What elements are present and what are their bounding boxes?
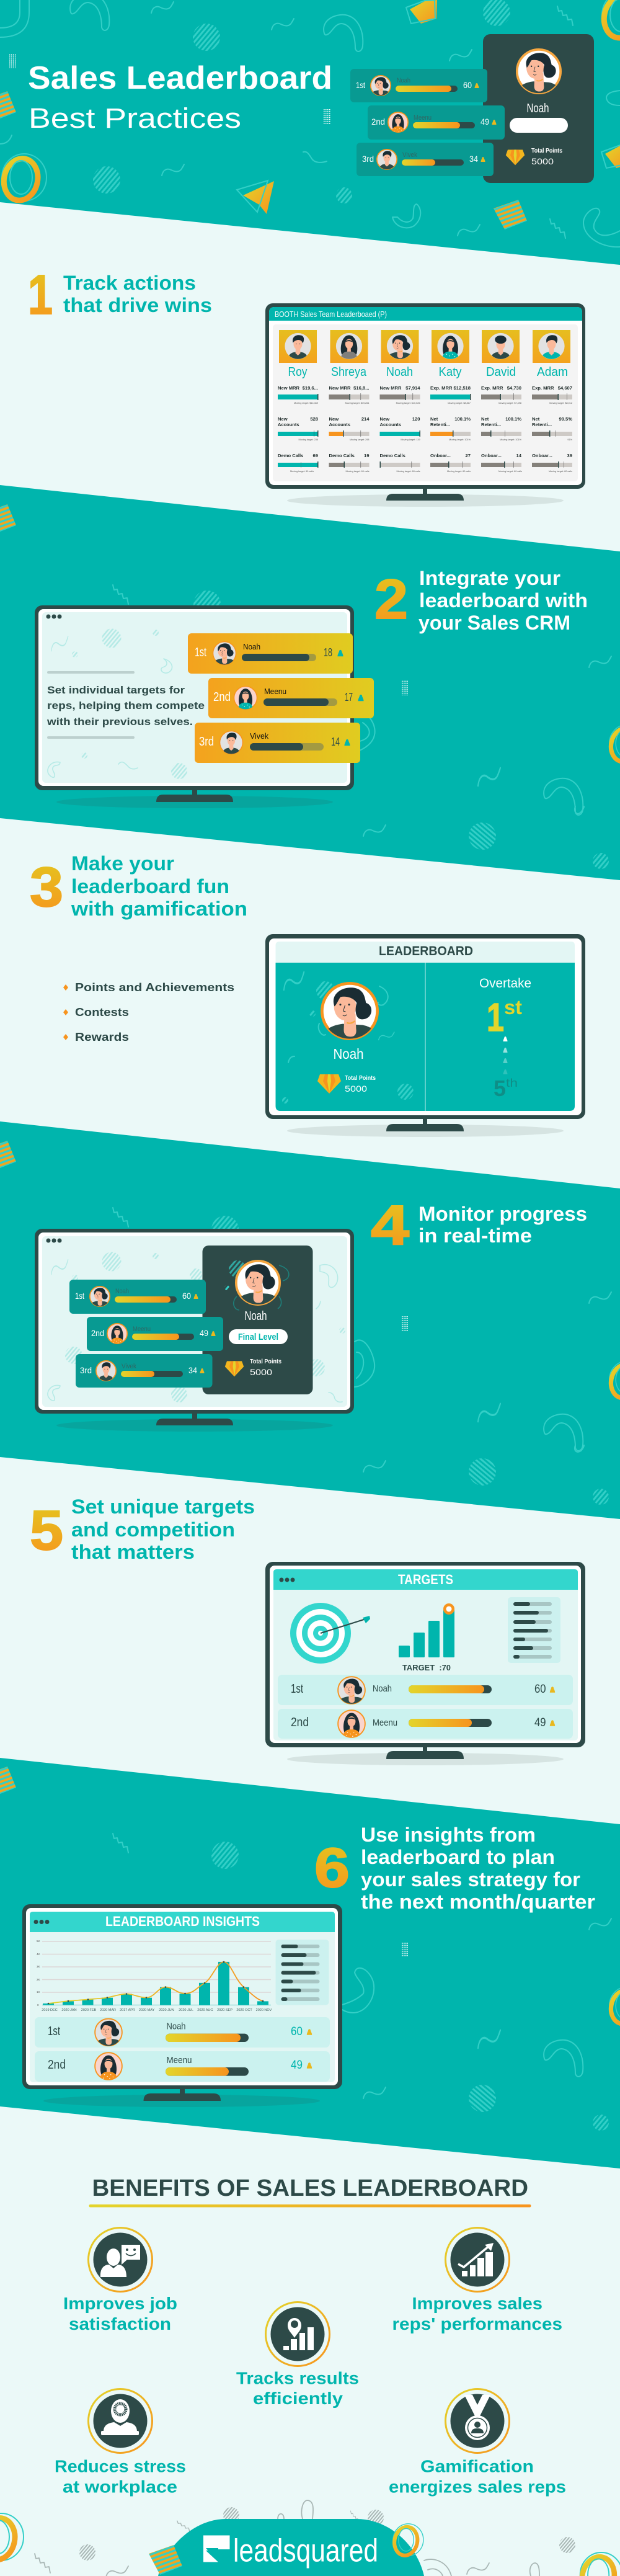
benefit: gamification: Gamification xyxy=(420,2456,534,2476)
overtake panel: 1 xyxy=(487,995,504,1040)
benefit: sales performance: reps' performances xyxy=(392,2314,562,2333)
rank card: Noah: Noah xyxy=(397,77,410,84)
row: Meenu: 2nd xyxy=(48,2058,66,2072)
column: Roy: Accounts xyxy=(278,422,299,427)
avatar: Noah xyxy=(321,983,379,1040)
row: Noah xyxy=(278,1675,573,1705)
combo chart: 2020 FEB xyxy=(81,2008,97,2012)
step 4 heading: Monitor progress xyxy=(418,1203,587,1225)
combo chart: 4K xyxy=(37,1953,40,1956)
column: Noah: Moving target: $10,026 xyxy=(396,402,420,404)
combo chart: 2020 NOV xyxy=(256,2008,272,2012)
step 1 number: 1 xyxy=(28,264,53,326)
step 6 heading xyxy=(361,1824,595,1913)
monitor 5: targets xyxy=(265,1562,585,1765)
column: Noah: 120 xyxy=(412,416,420,422)
profile panel: Total Points xyxy=(531,148,562,154)
profile panel: Total Points xyxy=(250,1358,281,1365)
benefit: sales performance: Improves sales xyxy=(412,2294,542,2313)
step 5 heading: Set unique targets xyxy=(71,1495,255,1518)
rank card: Vivek: 3rd xyxy=(362,154,374,164)
benefit: job satisfaction: Improves job xyxy=(63,2294,177,2313)
column: Adam: $4,607 xyxy=(558,385,572,391)
benefits heading: BENEFITS OF SALES LEADERBOARD xyxy=(92,2175,528,2201)
column: Katy: Retenti... xyxy=(430,422,450,427)
monitor 3: leaderboard overtake: 5000 xyxy=(345,1084,367,1094)
rank card: Noah xyxy=(69,1280,206,1314)
monitor 5: targets: TARGETS xyxy=(398,1572,453,1587)
rank card: Meenu: Meenu xyxy=(133,1326,151,1333)
column: Shreya: Demo Calls xyxy=(329,453,355,458)
column: Adam: Moving target: $8,012 xyxy=(549,402,572,404)
column: Shreya: Moving target: 60 calls xyxy=(346,470,370,473)
rank card: Noah: 1st xyxy=(356,80,365,90)
side progress list xyxy=(508,1597,560,1663)
column: David: 14 xyxy=(516,453,522,458)
step 4 heading xyxy=(418,1203,587,1247)
column: Noah: New xyxy=(379,416,389,422)
column: Adam: 99.5% xyxy=(559,416,572,422)
column: Katy: Moving target: 60 calls xyxy=(447,470,471,473)
column: Katy xyxy=(430,330,471,473)
profile panel xyxy=(202,1246,312,1394)
profile panel: 5000 xyxy=(531,156,554,166)
step 6 heading: your sales strategy for xyxy=(361,1868,580,1891)
benefit: tracks results xyxy=(236,2302,359,2408)
rank card: Vivek xyxy=(356,143,494,176)
bar chart: TARGET :70 xyxy=(402,1663,451,1672)
monitor 3: leaderboard overtake: Total Points xyxy=(345,1075,376,1082)
column: David: Onboar... xyxy=(481,453,502,458)
combo chart: 0 xyxy=(37,2003,39,2007)
column: Katy: Katy xyxy=(439,365,461,379)
icon: diamond xyxy=(317,1074,341,1094)
column: David: $4,730 xyxy=(507,385,521,391)
row: Noah xyxy=(35,2017,330,2048)
gold card: Meenu: 2nd xyxy=(213,690,231,704)
combo chart: 2020 SEP xyxy=(217,2008,232,2012)
column: Shreya: New xyxy=(329,416,339,422)
gold card: Noah: 1st xyxy=(195,646,206,659)
column: Katy: Net xyxy=(430,416,438,422)
gold card: Vivek xyxy=(195,723,360,763)
combo chart: 1K xyxy=(37,1990,40,1994)
monitor 1: team leaderboard xyxy=(265,303,585,507)
rank card: Vivek: Vivek xyxy=(402,151,417,159)
rank card: Vivek: 3rd xyxy=(80,1365,92,1375)
column: Noah: New MRR xyxy=(379,385,402,391)
column: David: Moving target: $7,498 xyxy=(498,402,521,404)
monitor 1: team leaderboard: BOOTH Sales Team Leaderboaed (P) xyxy=(275,310,387,319)
row: Noah: 1st xyxy=(291,1682,303,1696)
title xyxy=(28,60,332,134)
step 3 heading: with gamification xyxy=(71,898,247,920)
monitor 4: real-time progress xyxy=(35,1229,354,1432)
row: Noah: Noah xyxy=(166,2021,186,2032)
column: Roy: Roy xyxy=(288,365,308,379)
gold card: Meenu: Meenu xyxy=(264,687,286,696)
step 1 heading: that drive wins xyxy=(63,294,212,316)
rank card: Meenu xyxy=(87,1317,223,1351)
column: Roy: $19,6... xyxy=(303,385,318,391)
row: Noah: 1st xyxy=(48,2025,60,2038)
row: Meenu: 49 xyxy=(534,1716,546,1729)
step 6 number: 6 xyxy=(314,1837,350,1899)
icon: target xyxy=(290,1603,370,1664)
step 2 number: 2 xyxy=(374,569,408,631)
step 4 heading: in real-time xyxy=(418,1224,532,1247)
combo chart: 3K xyxy=(37,1965,40,1968)
column: Shreya xyxy=(329,330,370,473)
profile panel: 5000 xyxy=(250,1367,272,1377)
footer logo badge: leadsquared xyxy=(233,2533,378,2569)
gold card: Vivek: Vivek xyxy=(250,731,268,741)
header decorations xyxy=(0,0,620,247)
band 3 decorations xyxy=(0,1767,620,2131)
column: Noah: Moving target: 60 calls xyxy=(397,470,420,473)
bar chart xyxy=(399,1603,454,1672)
band 2 decorations xyxy=(0,1141,620,1505)
monitor 3: leaderboard overtake: Noah xyxy=(334,1046,363,1062)
column: Shreya: Moving target: $19,261 xyxy=(345,402,370,404)
column: Roy: Moving target: $14,469 xyxy=(294,402,318,404)
rank card: Noah: 1st xyxy=(75,1291,84,1301)
benefit: job satisfaction xyxy=(63,2228,177,2333)
rank card: Vivek: Vivek xyxy=(122,1363,136,1370)
column: Roy: 528 xyxy=(310,416,318,422)
overtake panel xyxy=(479,976,531,1101)
step 2 heading: your Sales CRM xyxy=(418,612,570,634)
step 6 heading: the next month/quarter xyxy=(361,1891,595,1913)
bullet list: Points and Achievements xyxy=(75,981,234,994)
combo chart: 2020 AUG xyxy=(197,2008,213,2012)
step 3 heading: leaderboard fun xyxy=(71,875,229,898)
column: David: David xyxy=(486,365,516,379)
overtake panel: Overtake xyxy=(479,976,531,991)
combo chart xyxy=(37,1940,272,2012)
column: Katy: Exp. MRR xyxy=(430,385,453,391)
step 1 heading: Track actions xyxy=(63,272,196,294)
step 6 heading: leaderboard to plan xyxy=(361,1846,555,1868)
row: Meenu xyxy=(35,2051,330,2082)
column: Roy: Moving target: 236 xyxy=(299,439,318,441)
icon: medal xyxy=(445,2389,510,2453)
column: David: 100.1% xyxy=(505,416,521,422)
rank card: Noah: 60 xyxy=(463,80,472,90)
row: Meenu xyxy=(278,1709,573,1739)
column: Katy: Onboar... xyxy=(430,453,451,458)
column: Adam: Exp. MRR xyxy=(532,385,554,391)
row: Noah: Noah xyxy=(373,1683,392,1694)
rank card: Meenu: Meenu xyxy=(414,114,432,122)
step 3 heading: Make your xyxy=(71,852,174,875)
column: David: Retenti... xyxy=(481,422,501,427)
footer logo badge xyxy=(149,2519,424,2576)
step 3 heading xyxy=(71,852,247,920)
column: Roy: Moving target: 60 calls xyxy=(290,470,314,473)
icon: pin and bars xyxy=(265,2302,330,2366)
column: Adam: Adam xyxy=(537,365,568,379)
rank card: Vivek: 34 xyxy=(188,1365,197,1375)
combo chart: 2017 APR xyxy=(120,2008,135,2012)
column: Noah xyxy=(379,330,420,473)
combo chart: 2020 JAN xyxy=(61,2008,77,2012)
row: Meenu: 2nd xyxy=(291,1716,309,1729)
monitor 6: leaderboard insights: LEADERBOARD INSIGHTS xyxy=(105,1914,260,1929)
rank card: Meenu: 49 xyxy=(200,1328,208,1338)
column: Noah: Noah xyxy=(386,365,413,379)
benefit: reduces stress: at workplace xyxy=(63,2477,177,2496)
icon: person with smiley xyxy=(88,2228,153,2291)
column: Shreya: New MRR xyxy=(329,385,351,391)
row: Noah: 60 xyxy=(534,1683,546,1696)
benefit: reduces stress: Reduces stress xyxy=(55,2456,186,2476)
column: Adam xyxy=(532,330,573,473)
combo chart: 2K xyxy=(37,1978,40,1981)
column: Roy: Demo Calls xyxy=(278,453,303,458)
profile panel xyxy=(483,34,594,183)
icon: person with thoughts xyxy=(88,2389,153,2453)
bullet list: Rewards xyxy=(75,1031,129,1043)
step 1 heading xyxy=(63,272,212,316)
column: David xyxy=(481,330,522,473)
rank card: Meenu: 2nd xyxy=(371,117,385,127)
step 3 number: 3 xyxy=(30,857,63,919)
column: David: Exp. MRR xyxy=(481,385,503,391)
combo chart: 2020 OCT xyxy=(236,2008,252,2012)
gold card: Noah: 18 xyxy=(324,646,332,659)
benefit: gamification xyxy=(389,2389,566,2496)
body text: with their previous selves. xyxy=(46,716,193,728)
rank card: Vivek: 34 xyxy=(469,154,478,164)
monitor 6: leaderboard insights xyxy=(22,1904,342,2107)
monitor 3: leaderboard overtake xyxy=(265,934,585,1137)
overtake panel: st xyxy=(504,996,522,1018)
column: Adam: Retenti... xyxy=(532,422,552,427)
footer decorations xyxy=(0,2500,620,2576)
column: Adam: Moving target: 60 calls xyxy=(549,470,572,473)
monitor 2: individual targets xyxy=(35,605,374,808)
row: Meenu: 49 xyxy=(291,2059,303,2072)
column: Katy: 100.1% xyxy=(454,416,471,422)
gold card: Noah: Noah xyxy=(243,642,260,651)
rank card: Noah: 60 xyxy=(182,1291,191,1301)
side progress list xyxy=(275,1940,329,2005)
column: Katy: 27 xyxy=(466,453,471,458)
column: Roy: 69 xyxy=(313,453,318,458)
benefit: job satisfaction: satisfaction xyxy=(69,2314,171,2333)
rank card: Noah: Noah xyxy=(115,1288,129,1295)
step 5 number: 5 xyxy=(30,1500,63,1562)
title: Best Practices xyxy=(29,102,241,134)
column: Shreya: Moving target: 298 xyxy=(350,439,370,441)
column: Adam: 91% xyxy=(567,439,573,441)
overtake panel: 5 xyxy=(494,1076,506,1101)
benefit: reduces stress xyxy=(55,2389,186,2496)
overtake panel: th xyxy=(506,1077,518,1089)
bullet list xyxy=(63,981,234,1043)
column: Katy: $12,518 xyxy=(454,385,471,391)
column: Noah: Demo Calls xyxy=(379,453,405,458)
bullet list: Contests xyxy=(75,1006,129,1018)
step 2 heading: leaderboard with xyxy=(419,589,588,612)
body text: reps, helping them compete xyxy=(47,700,205,711)
benefit: tracks results: Tracks results xyxy=(236,2368,359,2388)
column: Katy: Moving target: 101% xyxy=(449,439,471,441)
rank card: Meenu: 2nd xyxy=(91,1328,104,1338)
column: Roy: New xyxy=(278,416,288,422)
column: Noah: $7,914 xyxy=(405,385,420,391)
combo chart: 2020 JUL xyxy=(179,2008,193,2012)
gold card: Noah xyxy=(188,633,353,674)
body text xyxy=(46,684,205,728)
column: David: Net xyxy=(481,416,489,422)
step 5 heading: and competition xyxy=(71,1518,235,1541)
column: David: Moving target: 101% xyxy=(500,439,522,441)
column: Shreya: 214 xyxy=(361,416,370,422)
icon: growth chart xyxy=(445,2228,510,2291)
combo chart: 2020 MAY xyxy=(139,2008,154,2012)
header leaderboard widget xyxy=(350,34,594,183)
column: Shreya: $16,8... xyxy=(353,385,370,391)
column: Noah: Accounts xyxy=(379,422,401,427)
rank card: Meenu xyxy=(368,105,505,140)
column: Shreya: Shreya xyxy=(331,365,367,379)
benefit: tracks results: efficiently xyxy=(253,2389,343,2408)
step 4 number: 4 xyxy=(371,1195,409,1257)
title: Sales Leaderboard xyxy=(28,60,332,96)
row: Meenu: Meenu xyxy=(373,1718,397,1728)
column: Shreya: Accounts xyxy=(329,422,350,427)
step 5 heading xyxy=(71,1495,255,1563)
rank card: Noah xyxy=(350,69,487,102)
step 5 heading: that matters xyxy=(71,1541,195,1563)
combo chart: 2020 JUN xyxy=(159,2008,174,2012)
gold card: Meenu: 17 xyxy=(345,691,353,703)
column: Shreya: 19 xyxy=(364,453,370,458)
row: Meenu: Meenu xyxy=(166,2055,192,2066)
column: Adam: Net xyxy=(532,416,540,422)
column: Adam: Onboar... xyxy=(532,453,552,458)
column: David: Moving target: 60 calls xyxy=(498,470,522,473)
rank card: Meenu: 49 xyxy=(480,117,489,127)
step 6 heading: Use insights from xyxy=(361,1824,536,1846)
profile panel: Noah xyxy=(244,1309,267,1323)
monitor 3: leaderboard overtake: LEADERBOARD xyxy=(379,944,473,958)
body text: Set individual targets for xyxy=(47,684,185,696)
band 1 decorations xyxy=(0,504,620,869)
gold card: Meenu xyxy=(208,678,374,718)
column: Roy: New MRR xyxy=(278,385,300,391)
combo chart: 2020 MAR xyxy=(100,2008,116,2012)
benefit: sales performance xyxy=(392,2228,562,2333)
step 2 heading xyxy=(418,567,588,634)
profile panel: Noah xyxy=(527,102,549,115)
row: Noah: 60 xyxy=(291,2025,303,2038)
step 2 heading: Integrate your xyxy=(419,567,560,589)
benefit: gamification: energizes sales reps xyxy=(389,2477,566,2496)
rank card: Vivek xyxy=(76,1354,212,1388)
column: Katy: Moving target: $8,817 xyxy=(448,402,471,404)
combo chart: 2019 DEC xyxy=(42,2008,58,2012)
column: Adam: 39 xyxy=(567,453,572,458)
profile panel: Final Level xyxy=(238,1332,278,1342)
gold card: Vivek: 14 xyxy=(331,736,340,748)
column: Noah: Moving target: 119 xyxy=(401,439,420,441)
icon: logo mark xyxy=(203,2536,229,2562)
gold card: Vivek: 3rd xyxy=(199,735,214,749)
combo chart: 5K xyxy=(37,1940,40,1943)
column: Roy xyxy=(278,330,319,473)
